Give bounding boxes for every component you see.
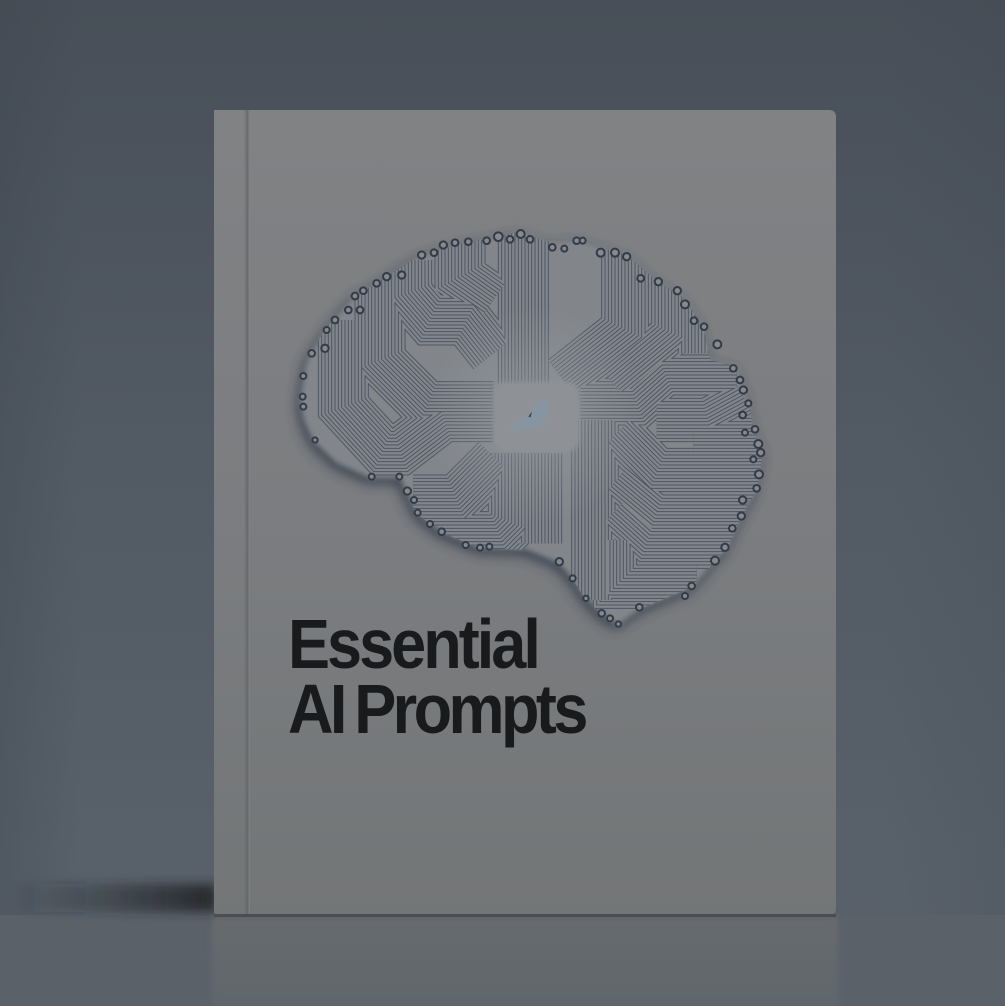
brain shadow	[297, 236, 761, 630]
title line 2: AI Prompts	[288, 671, 586, 749]
cast shadow left of book	[10, 884, 216, 912]
floor	[0, 915, 1005, 1006]
central chip	[494, 382, 579, 451]
brain circuit illustration	[280, 220, 780, 640]
book reflection on floor	[212, 917, 838, 1006]
title	[288, 606, 586, 749]
brain base	[300, 232, 763, 625]
title line 1: Essential	[288, 606, 538, 684]
book	[214, 110, 836, 917]
book bottom edge	[214, 914, 836, 917]
icon: leaf on chip	[509, 400, 548, 432]
circuit pads	[300, 230, 764, 627]
book cover	[214, 110, 836, 915]
brain circuit traces	[318, 232, 762, 609]
book spine crease	[244, 110, 250, 915]
